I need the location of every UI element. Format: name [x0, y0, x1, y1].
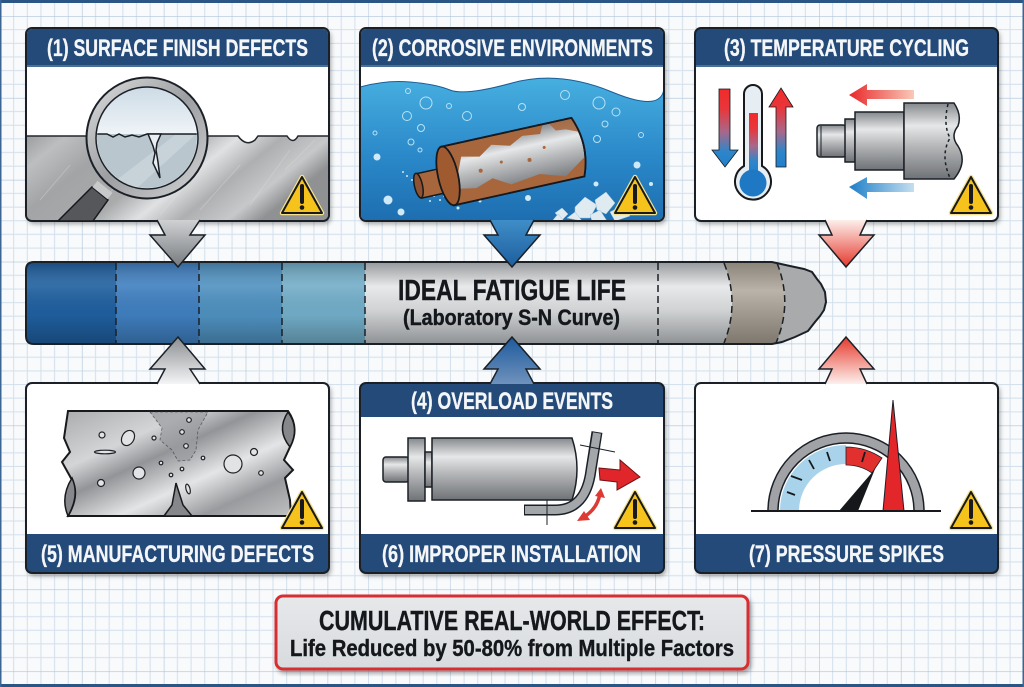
arrow: heating up	[769, 88, 793, 167]
fatigue life bar	[26, 262, 835, 344]
heading 1: (1) SURFACE FINISH DEFECTS	[47, 35, 308, 62]
icon: warning triangle	[951, 492, 991, 528]
arrow: temperature to bar	[819, 220, 874, 267]
panel 7: pressure spikes	[695, 383, 998, 573]
icon: warning triangle	[615, 492, 655, 528]
icon: warning triangle	[282, 177, 322, 213]
bar title: IDEAL FATIGUE LIFE	[398, 275, 626, 307]
callout title: CUMULATIVE REAL-WORLD EFFECT:	[319, 605, 705, 636]
icon: thermometer	[735, 85, 771, 200]
salt crystals	[553, 192, 630, 221]
arrow: corrosion to bar	[484, 220, 540, 267]
bar subtitle: (Laboratory S-N Curve)	[403, 305, 620, 330]
arrow: blue contraction	[849, 177, 914, 199]
arrow: overload force	[599, 460, 640, 490]
panel 4/6: overload events and improper installation	[360, 383, 664, 573]
chart: pressure gauge with spike	[751, 400, 941, 511]
icon: warning triangle	[951, 177, 991, 213]
arrow: pressure to bar	[819, 337, 874, 384]
heading 7: (7) PRESSURE SPIKES	[749, 541, 944, 568]
icon: rusted cylinder	[407, 117, 590, 213]
panel 2: corrosive environments	[360, 28, 664, 221]
arrow: curved motion	[577, 488, 605, 521]
callout subtitle: Life Reduced by 50-80% from Multiple Factors	[290, 635, 734, 661]
arrow: surface finish to bar	[150, 220, 205, 267]
icon: shaft and bent bracket	[383, 432, 615, 525]
heading 5: (5) MANUFACTURING DEFECTS	[41, 541, 314, 568]
icon: stepped shaft	[817, 103, 962, 179]
icon: magnifying glass with crack	[58, 78, 208, 221]
bubbles	[373, 88, 653, 216]
heading 6: (6) IMPROPER INSTALLATION	[382, 541, 641, 568]
arrow: red expansion	[849, 84, 914, 106]
icon: metal plate with voids	[62, 411, 295, 516]
heading 2: (2) CORROSIVE ENVIRONMENTS	[372, 35, 653, 62]
icon: warning triangle	[615, 177, 655, 213]
panel 5: manufacturing defects	[26, 383, 329, 573]
arrow: manufacturing to bar	[150, 337, 205, 384]
callout: cumulative effect	[276, 596, 748, 669]
heading 4: (4) OVERLOAD EVENTS	[411, 388, 613, 415]
icon: warning triangle	[282, 492, 322, 528]
panel 3: temperature cycling	[695, 28, 998, 221]
arrow: overload to bar	[484, 337, 540, 384]
arrow: cooling down	[712, 89, 738, 167]
panel 1: surface finish defects	[26, 28, 329, 221]
